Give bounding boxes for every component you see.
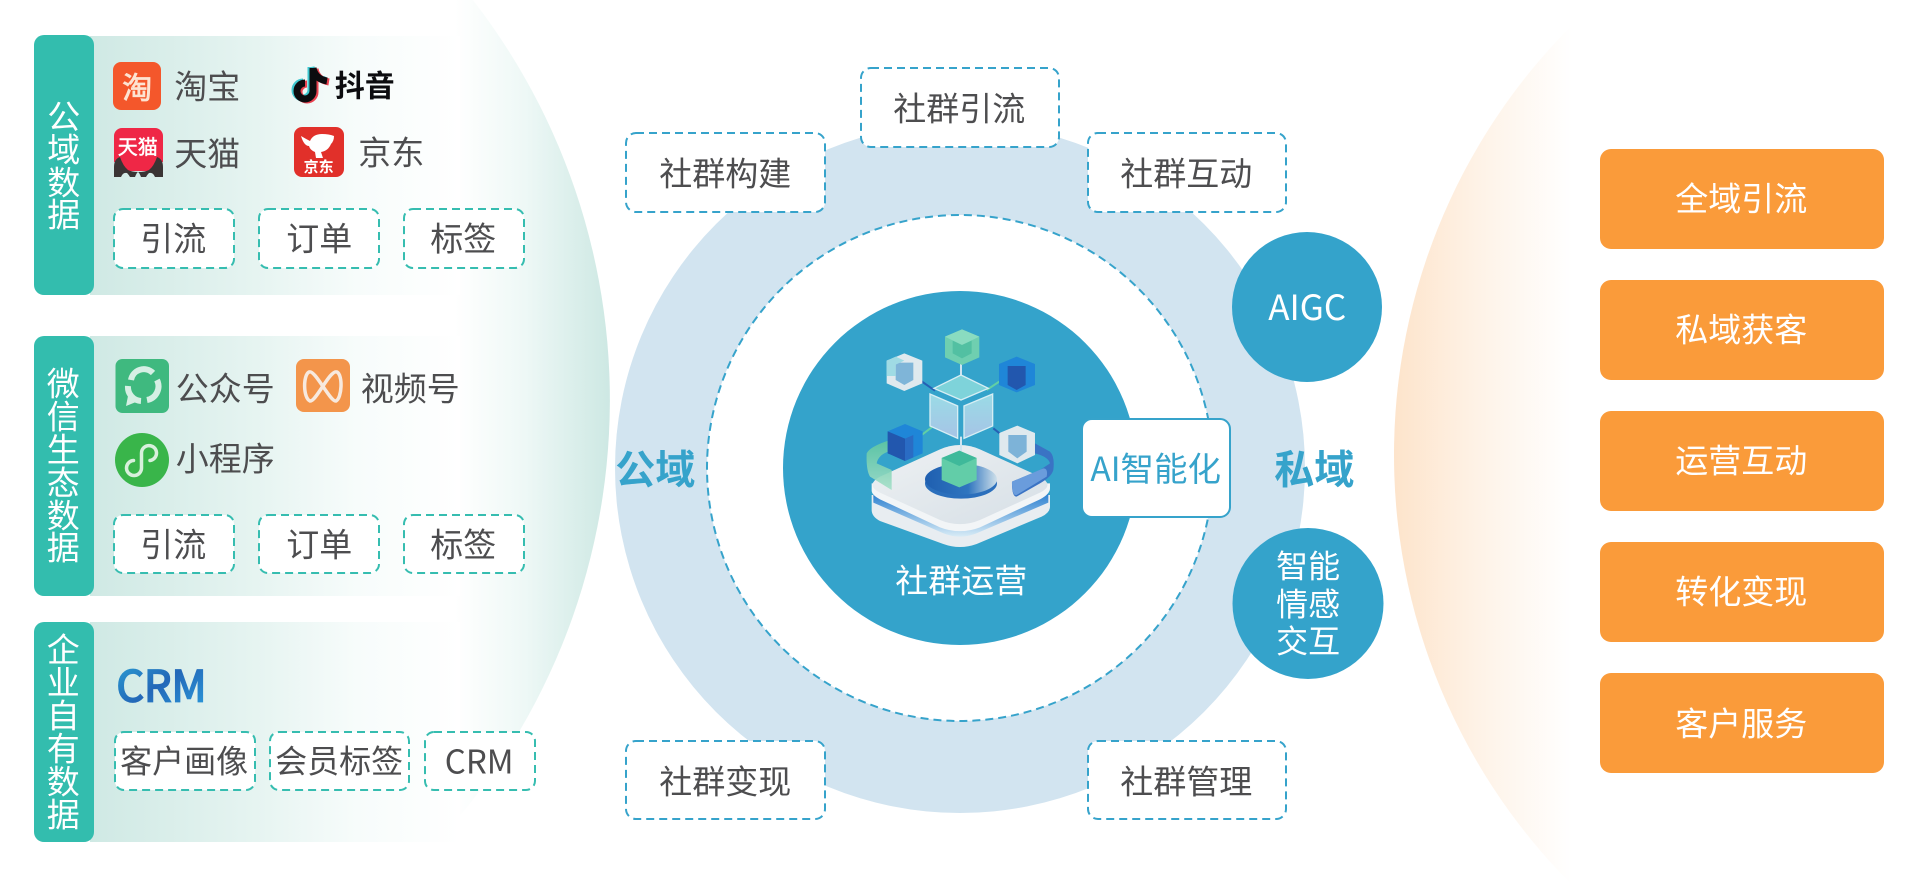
cube: mid-left blue xyxy=(888,424,923,461)
cube: front green xyxy=(942,451,977,487)
upper plate xyxy=(872,483,1050,531)
right orange arc background xyxy=(1394,0,1650,895)
tag: labels xyxy=(404,515,524,573)
core circle xyxy=(783,291,1137,645)
label bar: enterprise owned data: 有 xyxy=(47,722,80,770)
label bar: wechat ecosystem data: 态 xyxy=(47,456,80,504)
button: conversion monetization: 转化变现 xyxy=(1675,565,1807,613)
button: omni-channel traffic xyxy=(1600,149,1884,249)
tag: labels xyxy=(404,209,524,268)
icon: tmall xyxy=(114,128,163,177)
tag: orders: 订单 xyxy=(286,518,352,566)
illustration: isometric platform with cubes xyxy=(867,329,1054,547)
box: AI intelligence: AI智能化 xyxy=(1090,442,1221,491)
text: jd: 京东 xyxy=(358,126,424,174)
icon: taobao: 淘 xyxy=(122,63,152,107)
box: community monetization xyxy=(626,741,825,819)
inner dashed circle xyxy=(707,215,1213,721)
label bar: wechat ecosystem data: 信 xyxy=(47,390,80,438)
text: video account: 视频号 xyxy=(361,362,460,410)
label bar: wechat ecosystem data xyxy=(34,336,94,596)
label bar: public domain data: 域 xyxy=(47,123,80,171)
disk xyxy=(925,468,997,499)
label: public domain: 公域 xyxy=(615,437,695,495)
label bar: public domain data: 公 xyxy=(47,90,80,138)
tag: orders xyxy=(259,209,379,268)
ring: community operations xyxy=(615,123,1305,813)
tag: traffic: 引流 xyxy=(140,518,206,566)
button: operations interaction: 运营互动 xyxy=(1675,434,1807,482)
text: community operations: 社群运营 xyxy=(895,554,1027,602)
button: private domain acquisition: 私域获客 xyxy=(1675,303,1807,351)
box: community traffic: 社群引流 xyxy=(893,82,1025,130)
tag: traffic xyxy=(114,515,234,573)
box: community building xyxy=(626,133,825,212)
icon: wechat official account xyxy=(116,359,169,413)
cube: upper-left white xyxy=(887,353,922,391)
tag: crm: CRM xyxy=(445,735,514,783)
panel: enterprise owned data xyxy=(34,622,535,842)
box: AI intelligence xyxy=(1082,419,1230,517)
circle: intelligent emotional interaction: 智能 xyxy=(1276,541,1340,587)
bands xyxy=(867,441,892,490)
button: operations interaction xyxy=(1600,411,1884,511)
icon: douyin xyxy=(295,67,329,100)
button: private domain acquisition xyxy=(1600,280,1884,380)
label bar: wechat ecosystem data: 微 xyxy=(47,357,80,405)
tag: traffic: 引流 xyxy=(140,212,206,260)
label bar: enterprise owned data: 据 xyxy=(47,788,80,836)
box: community building: 社群构建 xyxy=(659,147,791,195)
icon: mini program xyxy=(115,433,169,487)
label bar: enterprise owned data: 业 xyxy=(47,656,80,704)
circle: intelligent emotional interaction: 情感 xyxy=(1276,579,1340,625)
icon: jd: 京东 xyxy=(304,156,334,177)
central cube xyxy=(934,375,988,400)
label bar: enterprise owned data: 数 xyxy=(47,755,80,803)
left teal arc background xyxy=(300,0,610,895)
panel: public domain data xyxy=(34,35,524,295)
button: customer service xyxy=(1600,673,1884,773)
button: customer service: 客户服务 xyxy=(1675,697,1807,745)
tag: labels: 标签 xyxy=(430,518,496,566)
box: community interaction xyxy=(1088,133,1286,212)
circle: intelligent emotional interaction: 交互 xyxy=(1276,616,1340,662)
panel: wechat ecosystem data xyxy=(34,336,524,596)
tag: member labels: 会员标签 xyxy=(275,736,403,782)
label bar: public domain data xyxy=(34,35,94,295)
label bar: wechat ecosystem data: 数 xyxy=(47,489,80,537)
icon: tmall: 天猫 xyxy=(118,131,158,160)
label bar: public domain data: 据 xyxy=(47,188,80,236)
circle: AIGC: AIGC xyxy=(1268,280,1346,331)
tag: labels: 标签 xyxy=(430,212,496,260)
icon: taobao xyxy=(113,62,161,110)
text: douyin: 抖音 xyxy=(335,61,395,105)
box: community management: 社群管理 xyxy=(1120,755,1252,803)
circle: intelligent emotional interaction xyxy=(1232,528,1384,679)
label: private domain: 私域 xyxy=(1274,437,1354,495)
tag: customer portrait: 客户画像 xyxy=(120,736,248,782)
box: community monetization: 社群变现 xyxy=(659,755,791,803)
icon: crm logo: CRM xyxy=(117,652,207,714)
box: community management xyxy=(1088,741,1286,819)
tag: traffic xyxy=(114,209,234,268)
text: taobao: 淘宝 xyxy=(174,60,240,108)
tag: orders: 订单 xyxy=(286,212,352,260)
box: community traffic xyxy=(861,68,1059,147)
box: community interaction: 社群互动 xyxy=(1120,147,1252,195)
label bar: public domain data: 数 xyxy=(47,156,80,204)
cube: upper-right blue xyxy=(999,357,1035,392)
circle: AIGC xyxy=(1232,232,1382,382)
cube: top green xyxy=(945,329,979,365)
tag: crm xyxy=(425,732,535,790)
icon: jd xyxy=(294,127,344,177)
label bar: wechat ecosystem data: 据 xyxy=(47,521,80,569)
lower plate xyxy=(872,495,1050,547)
tag: orders xyxy=(259,515,379,573)
label bar: enterprise owned data: 企 xyxy=(47,623,80,671)
connectors xyxy=(921,363,1002,452)
button: omni-channel traffic: 全域引流 xyxy=(1675,172,1807,220)
label bar: enterprise owned data xyxy=(34,622,94,842)
icon: video account xyxy=(296,359,350,412)
label bar: enterprise owned data: 自 xyxy=(47,689,80,737)
button: conversion monetization xyxy=(1600,542,1884,642)
cube: mid-right white xyxy=(999,426,1035,463)
label bar: wechat ecosystem data: 生 xyxy=(47,423,80,471)
text: tmall: 天猫 xyxy=(174,127,240,175)
text: official account: 公众号 xyxy=(176,362,275,410)
text: mini program: 小程序 xyxy=(176,432,275,480)
